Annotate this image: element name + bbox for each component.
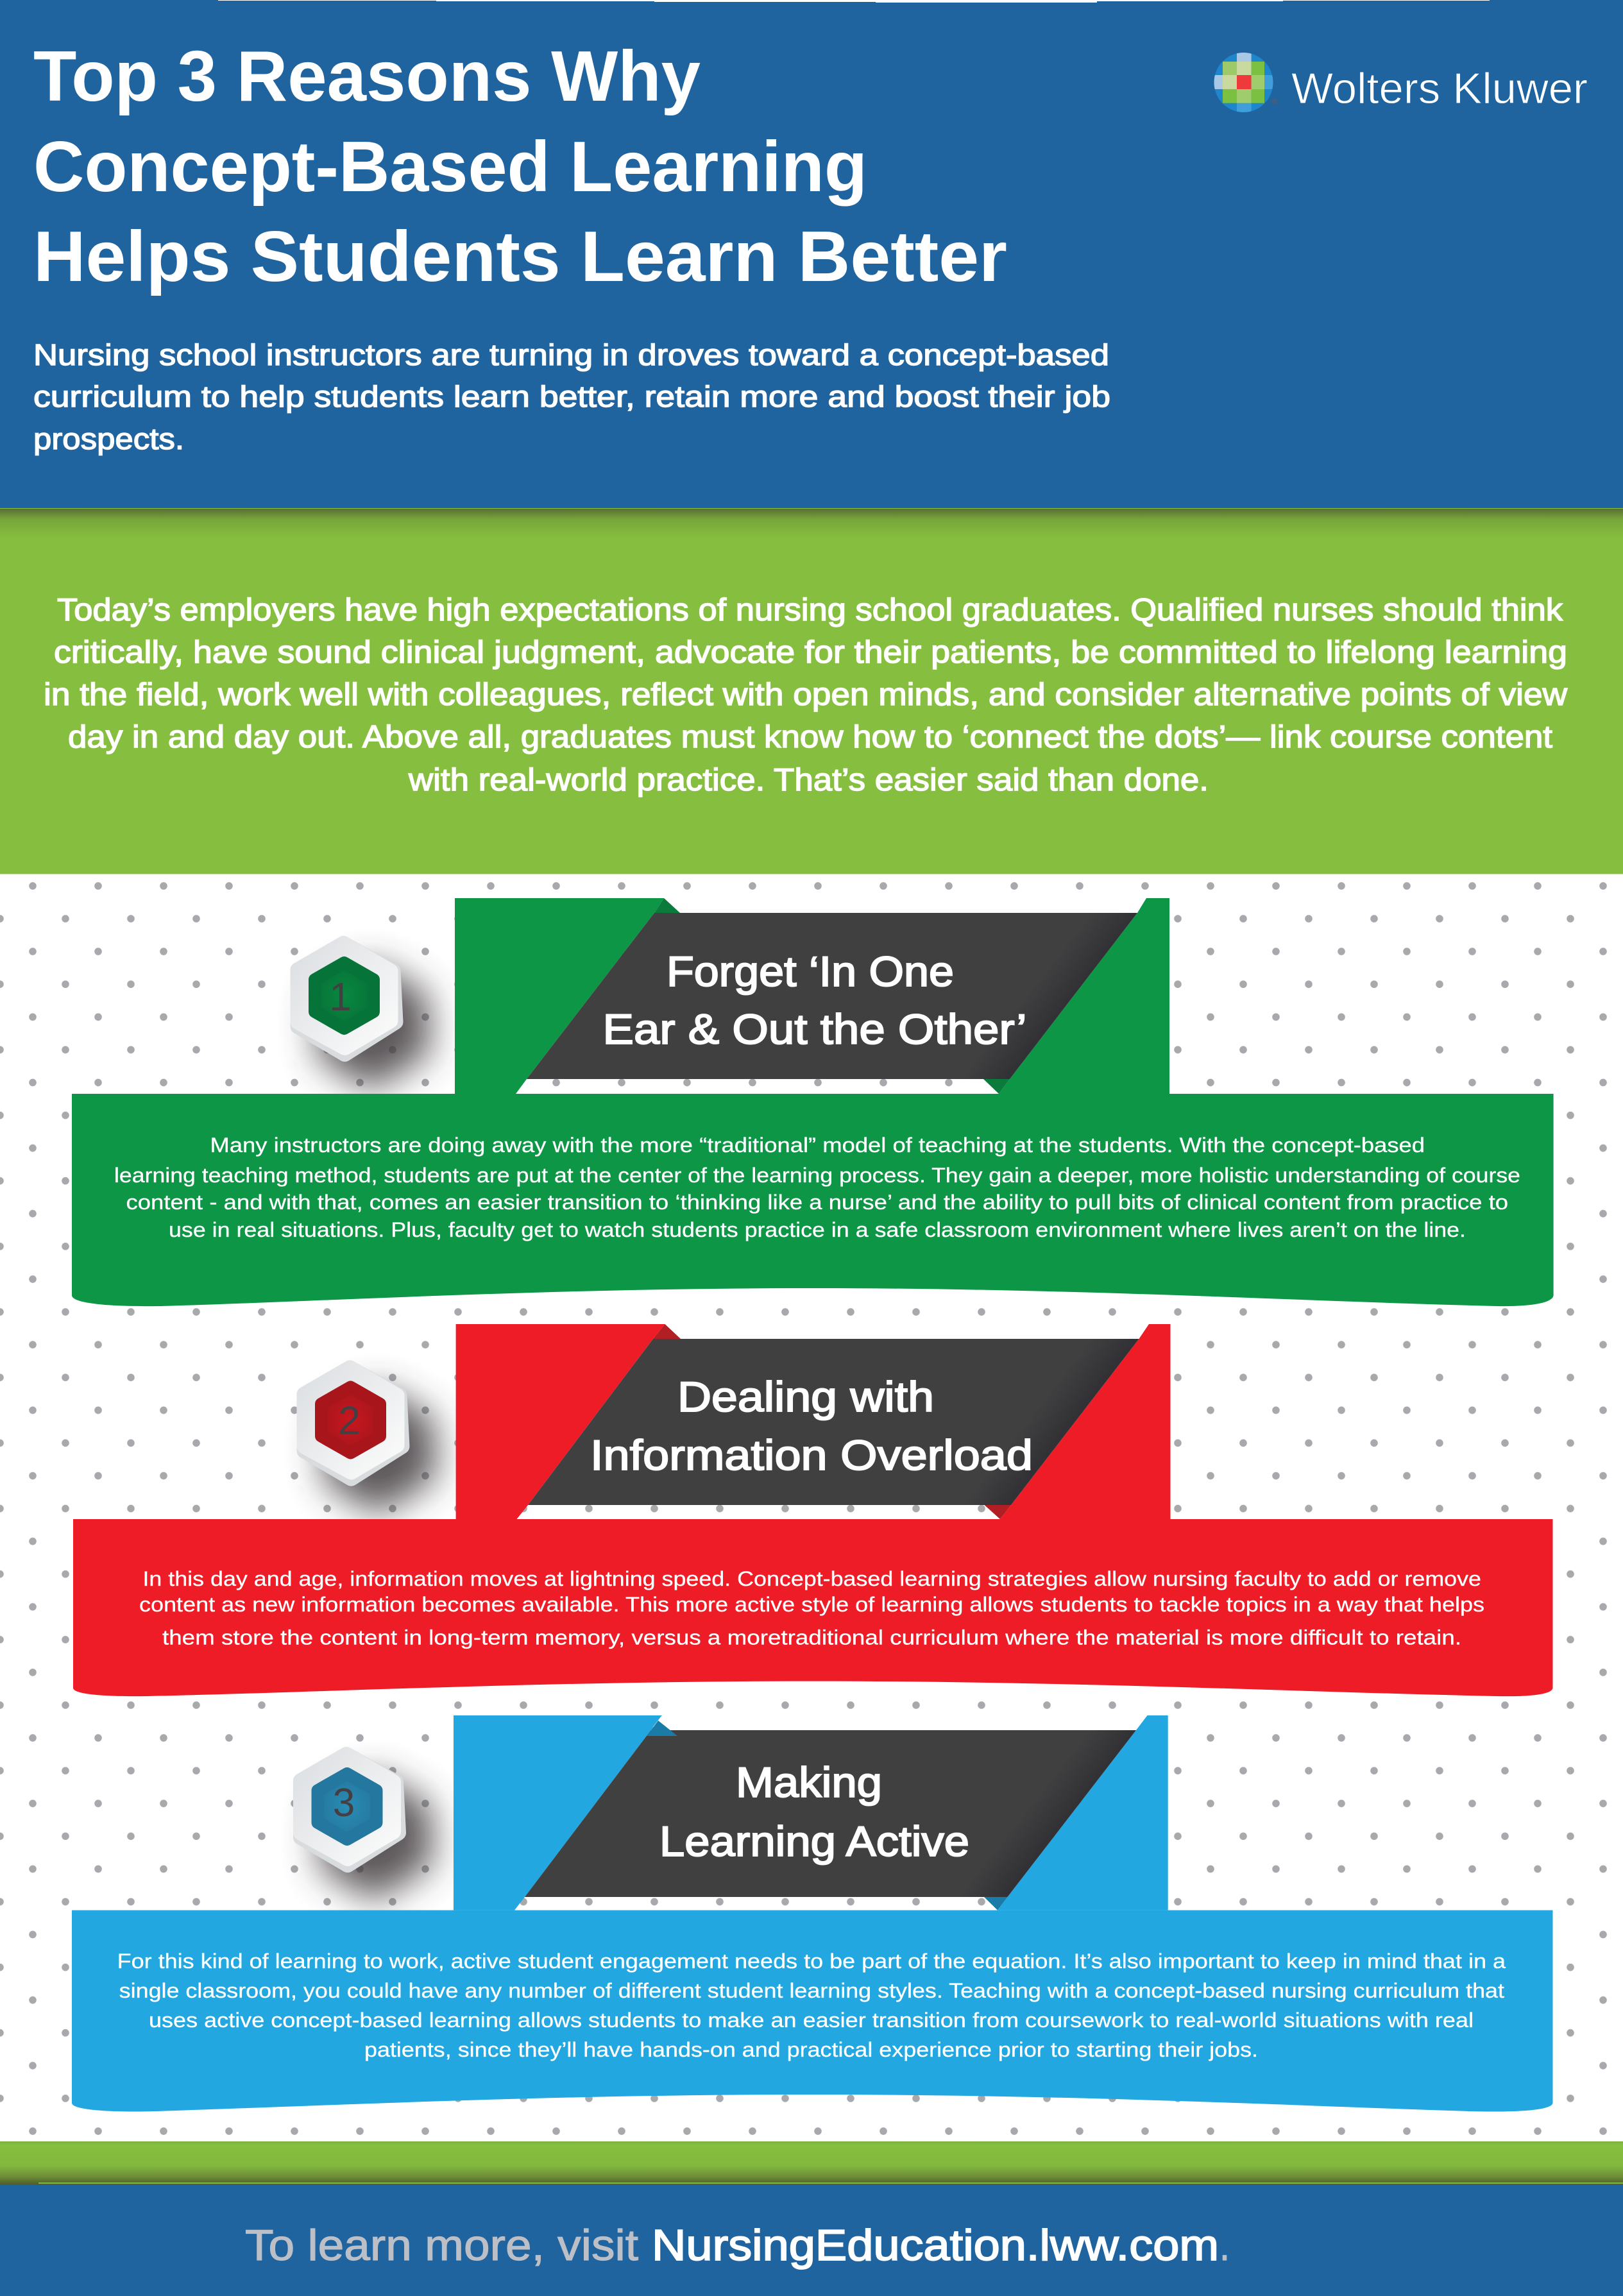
body text — [117, 1950, 1506, 2061]
body text: Many instructors are doing away with the more “traditional” model of teaching at the students. With the concept-based — [210, 1134, 1425, 1157]
body text: use in real situations. Plus, faculty get to watch students practice in a safe classroom environment where lives aren’t on the line. — [169, 1218, 1466, 1241]
title — [33, 37, 1007, 296]
icon: number 1 hexagon badge: 1 — [329, 975, 352, 1019]
intro text: critically, have sound clinical judgment, advocate for their patients, be committed to lifelong learning — [54, 635, 1567, 670]
icon: number 1 hexagon badge — [298, 944, 422, 1081]
body text: patients, since they’ll have hands-on and practical experience prior to starting their jobs. — [364, 2038, 1258, 2061]
subtitle text: prospects. — [33, 422, 184, 455]
body text — [114, 1134, 1520, 1241]
intro text: with real-world practice. That’s easier said than done. — [408, 763, 1209, 797]
body text: uses active concept-based learning allows students to make an easier transition from coursework to real-world situations with real — [149, 2009, 1474, 2032]
icon: number 3 hexagon badge: 3 — [333, 1781, 355, 1825]
heading banner: Forget ‘In One — [667, 948, 954, 995]
intro text: day in and day out. Above all, graduates must know how to ‘connect the dots’— link course content — [68, 720, 1552, 754]
body text: content - and with that, comes an easier transition to ‘thinking like a nurse’ and the ability to pull bits of clinical content from practice to — [126, 1191, 1508, 1214]
heading banner: Making — [736, 1758, 882, 1806]
heading banner — [525, 1717, 1136, 1910]
body text — [139, 1567, 1484, 1649]
ribbon tab — [455, 898, 1169, 1094]
body text: learning teaching method, students are put at the center of the learning process. They gain a deeper, more holistic understanding of course — [114, 1164, 1520, 1187]
body text: In this day and age, information moves at lightning speed. Concept-based learning strategies allow nursing faculty to add or remove — [142, 1567, 1481, 1590]
intro text: in the field, work well with colleagues, reflect with open minds, and consider alternative points of view — [44, 677, 1568, 712]
heading banner: Ear & Out the Other’ — [603, 1005, 1026, 1053]
heading banner — [527, 913, 1137, 1079]
body text: content as new information becomes available. This more active style of learning allows students to tackle topics in a way that helps — [139, 1593, 1484, 1616]
title: Helps Students Learn Better — [33, 217, 1007, 296]
icon: Wolters Kluwer logo — [1212, 51, 1588, 115]
body ribbon — [72, 1910, 1552, 2111]
heading banner: Information Overload — [590, 1431, 1033, 1479]
footer call to action: NursingEducation.lww.com — [652, 2221, 1219, 2270]
body ribbon — [72, 1094, 1554, 1306]
footer call to action: . — [1219, 2221, 1230, 2270]
body ribbon — [73, 1519, 1552, 1696]
intro text — [44, 593, 1568, 797]
body text: For this kind of learning to work, active student engagement needs to be part of the equation. It’s also important to keep in mind that in a — [117, 1950, 1506, 1973]
panel: footer — [0, 2182, 1623, 2296]
subtitle text: Nursing school instructors are turning in droves toward a concept-based — [33, 338, 1109, 371]
dotted background — [0, 874, 1623, 2141]
heading banner: Dealing with — [677, 1373, 934, 1420]
body text: single classroom, you could have any number of different student learning styles. Teaching with a concept-based nursing curriculum that — [119, 1979, 1504, 2002]
icon: number 3 hexagon badge — [301, 1755, 425, 1892]
heading banner: Learning Active — [659, 1817, 969, 1865]
panel: reason 2 — [73, 1324, 1552, 1696]
footer call to action: To learn more, visit — [245, 2221, 638, 2270]
panel: reason 3 — [72, 1715, 1552, 2111]
body text: them store the content in long-term memory, versus a moretraditional curriculum where the material is more difficult to retain. — [162, 1626, 1461, 1649]
panel: header — [0, 0, 1623, 508]
heading banner — [528, 1339, 1139, 1505]
icon: number 2 hexagon badge: 2 — [338, 1399, 361, 1443]
ribbon tab — [454, 1715, 1168, 1910]
title: Top 3 Reasons Why — [33, 37, 701, 116]
panel: green introduction band — [0, 508, 1623, 874]
ribbon tab — [456, 1324, 1170, 1519]
title: Concept-Based Learning — [33, 127, 867, 207]
intro text: Today’s employers have high expectations of nursing school graduates. Qualified nurses should think — [57, 593, 1563, 627]
icon: number 2 hexagon badge — [304, 1368, 429, 1505]
footer call to action — [245, 2221, 1230, 2270]
footer green band — [0, 2141, 1623, 2185]
icon: Wolters Kluwer logo: Wolters Kluwer — [1291, 64, 1588, 113]
panel: reason 1 — [72, 898, 1554, 1306]
subtitle text: curriculum to help students learn better, retain more and boost their job — [33, 380, 1110, 413]
subtitle text — [33, 338, 1110, 455]
